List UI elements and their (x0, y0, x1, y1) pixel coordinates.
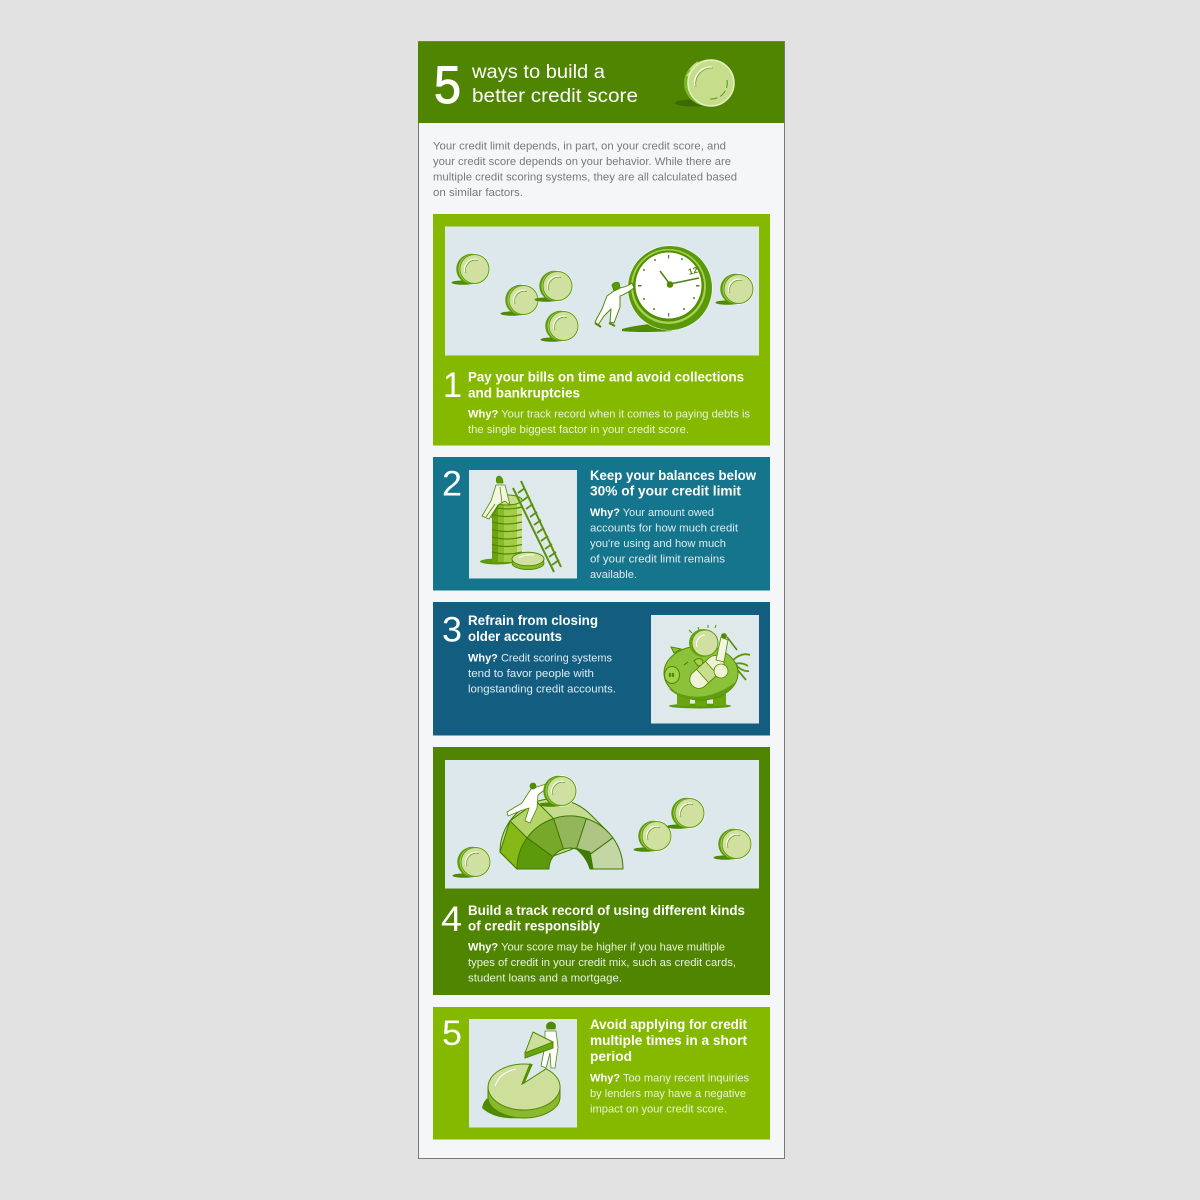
intro text: multiple credit scoring systems, they are all calculated based (433, 172, 737, 184)
step 5 explanation: impact on your credit score. (590, 1104, 727, 1116)
icon: impact rays (689, 625, 716, 633)
illustration: score gauge and coins (445, 760, 759, 888)
step 4 explanation: types of credit in your credit mix, such as credit cards, (468, 957, 736, 969)
step 2 heading (590, 468, 756, 498)
step 5 heading: period (590, 1049, 632, 1064)
intro text: Your credit limit depends, in part, on your credit score, and (433, 140, 726, 152)
icon: person holding slice (541, 1022, 558, 1068)
step 2 explanation: of your credit limit remains (590, 554, 725, 566)
icon: coins (452, 775, 752, 878)
step 1 explanation: Why? Your track record when it comes to paying debts is (468, 408, 750, 420)
step 4 heading (468, 903, 745, 934)
step 1 explanation: the single biggest factor in your credit score. (468, 424, 689, 436)
step 4 heading: Build a track record of using different kinds (468, 903, 745, 918)
panel: step 2 (433, 457, 770, 590)
icon: person pushing clock (595, 282, 634, 327)
illustration: pie with missing slice (469, 1019, 577, 1128)
icon: person sitting (482, 476, 510, 519)
title (471, 61, 638, 107)
icon: pie (488, 1064, 560, 1118)
panel: step 1 (433, 214, 770, 446)
step 3 heading: Refrain from closing (468, 613, 598, 628)
icon: pie shadow (482, 1096, 520, 1118)
step 3 explanation: longstanding credit accounts. (468, 684, 616, 696)
icon: coin on pig (689, 629, 718, 657)
title: better credit score (472, 85, 638, 107)
step 2 explanation: available. (590, 569, 637, 581)
big number 5: 5 (434, 56, 461, 115)
step 5 heading: Avoid applying for credit (590, 1017, 747, 1032)
intro text: your credit score depends on your behavior. While there are (433, 156, 731, 168)
step 1 heading: Pay your bills on time and avoid collections (468, 370, 744, 384)
panel: step 3 (433, 602, 770, 736)
step 4 explanation: Why? Your score may be higher if you have multiple (468, 942, 725, 954)
step 2 heading: 30% of your credit limit (590, 484, 741, 498)
icon: coins (452, 253, 754, 342)
step 1 explanation (468, 408, 750, 436)
number 2: 2 (442, 464, 462, 504)
illustration: coin stack and ladder (469, 470, 577, 578)
icon: lying coin (512, 552, 544, 570)
step 2 explanation: you're using and how much (590, 538, 726, 550)
step 5 explanation: Why? Too many recent inquiries (590, 1072, 749, 1084)
step 2 heading: Keep your balances below (590, 468, 756, 483)
step 5 explanation: by lenders may have a negative (590, 1088, 746, 1100)
step 5 heading: multiple times in a short (590, 1033, 747, 1048)
step 4 explanation: student loans and a mortgage. (468, 972, 622, 984)
intro text (433, 140, 737, 199)
step 3 heading (468, 613, 598, 644)
icon: sprigs (733, 654, 750, 680)
step 5 heading (590, 1017, 747, 1064)
intro text: on similar factors. (433, 187, 523, 199)
step 4 explanation (468, 942, 736, 984)
icon: clock (622, 246, 712, 332)
panel: step 5 (433, 1007, 770, 1140)
step 1 heading (468, 370, 744, 400)
step 2 explanation: Why? Your amount owed (590, 507, 714, 519)
step 3 explanation: Why? Credit scoring systems (468, 652, 612, 664)
illustration: coins and clock (445, 226, 759, 356)
icon: bandage (686, 652, 728, 692)
icon: ladder (513, 481, 561, 572)
panel: step 4 (433, 747, 770, 995)
icon: coin stack (492, 495, 522, 562)
card (418, 42, 784, 1158)
number 5: 5 (442, 1014, 462, 1053)
icon: lifted slice (525, 1032, 553, 1058)
number 1: 1 (443, 366, 462, 405)
icon: person pushing coin (507, 783, 547, 823)
illustration: piggy bank (651, 615, 759, 724)
number 3: 3 (442, 610, 462, 650)
icon: clock: 12 (687, 265, 699, 277)
number 4: 4 (441, 900, 462, 939)
step 2 explanation (590, 507, 739, 581)
icon: person with pick (716, 634, 737, 662)
header band (418, 42, 784, 123)
step 3 explanation: tend to favor people with (468, 668, 594, 680)
step 3 explanation (468, 652, 616, 696)
step 1 heading: and bankruptcies (468, 386, 580, 400)
step 5 explanation (590, 1072, 749, 1116)
icon: pig body (664, 646, 738, 708)
icon: coin (675, 60, 734, 106)
step 2 explanation: accounts for how much credit (590, 522, 739, 534)
step 4 heading: of credit responsibly (468, 918, 600, 934)
title: ways to build a (471, 61, 605, 83)
step 3 heading: older accounts (468, 629, 562, 644)
icon: gauge (500, 799, 623, 869)
